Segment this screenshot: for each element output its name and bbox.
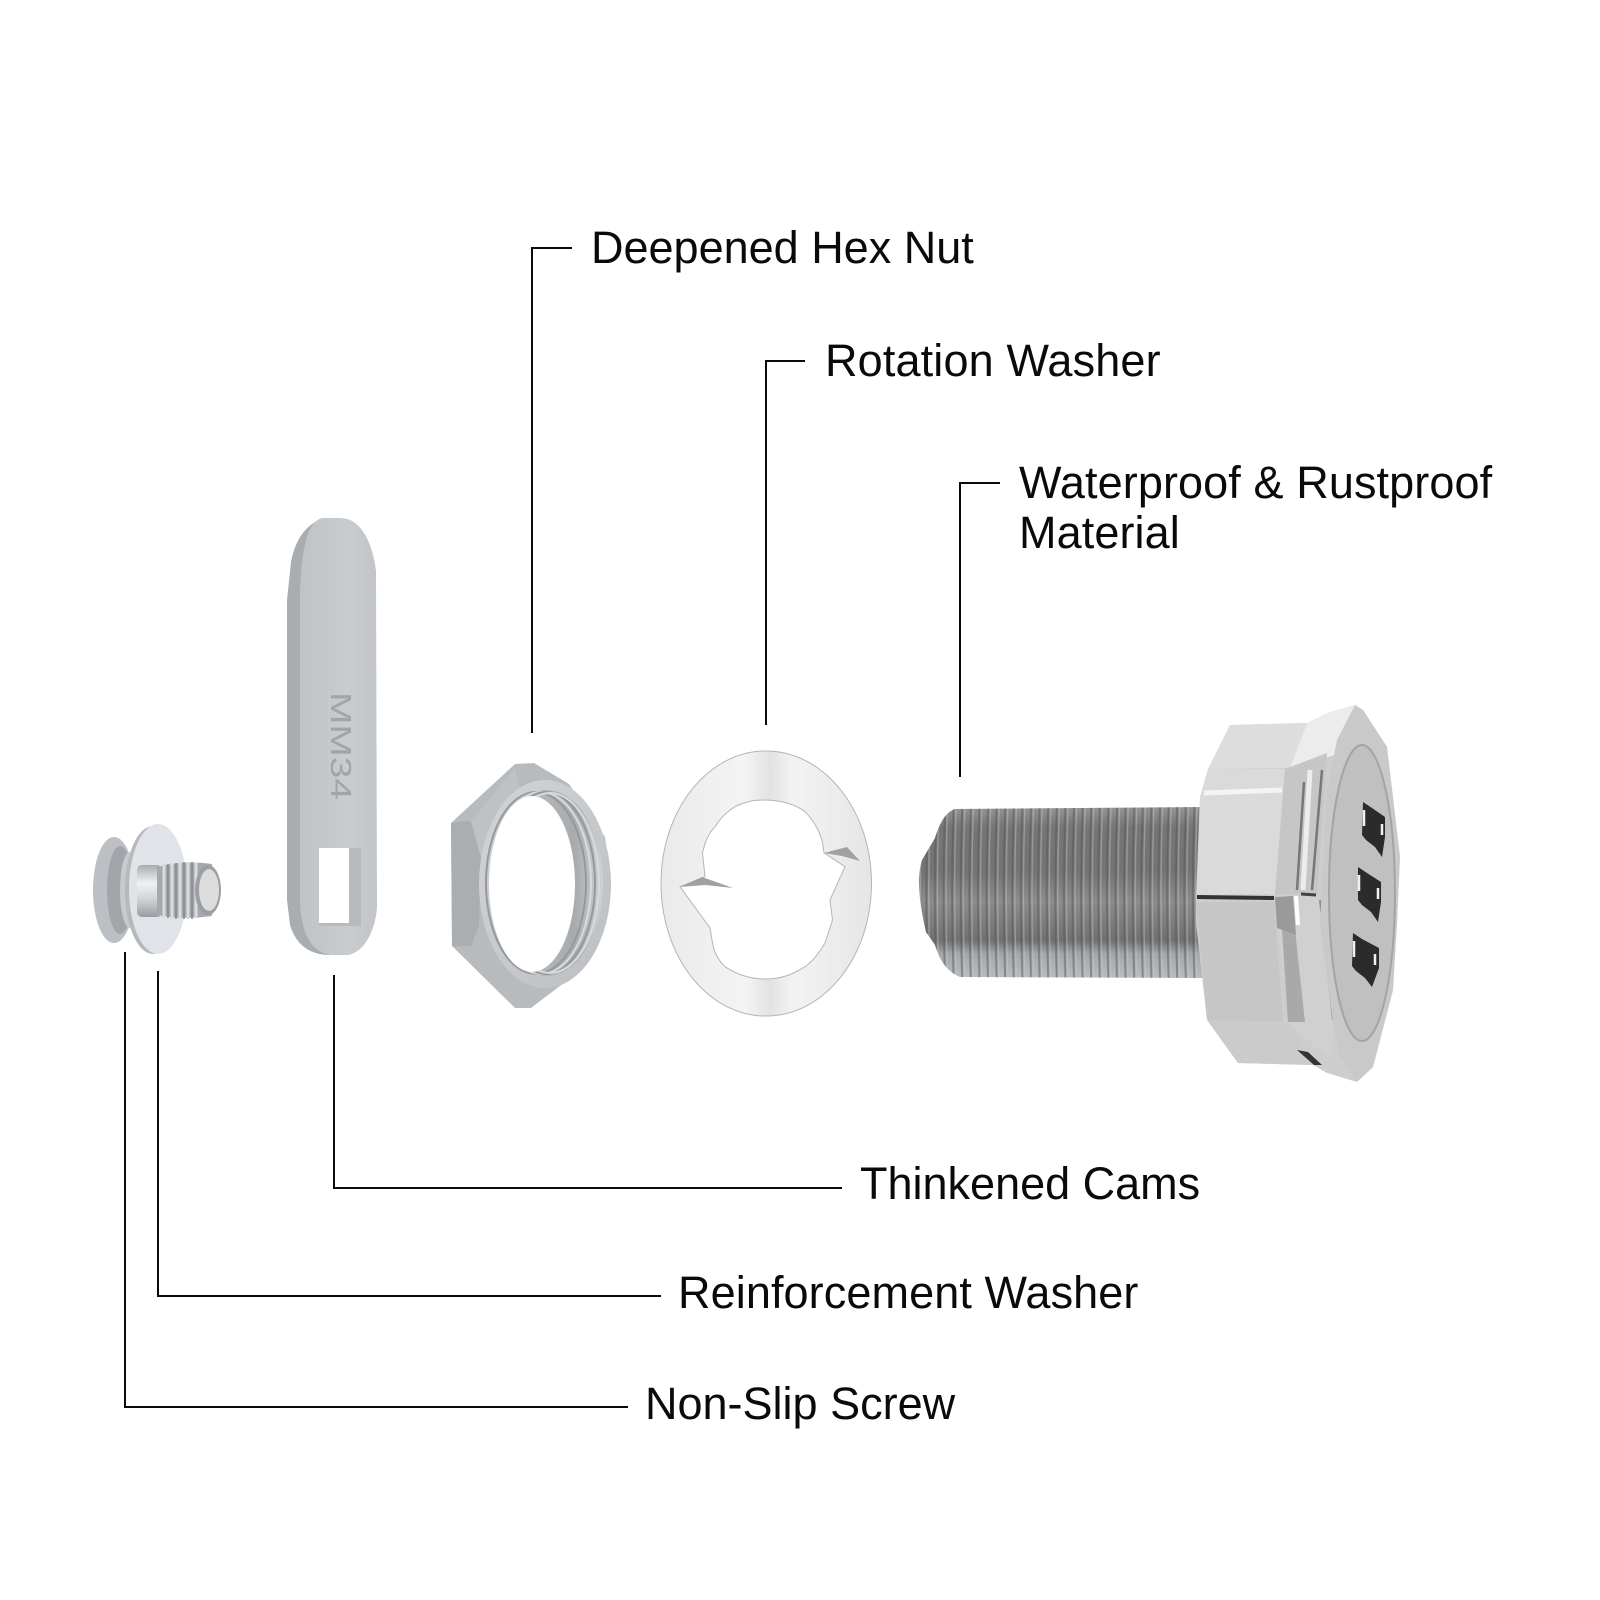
- head chrome bevel: [1275, 753, 1327, 894]
- nut left flat: [451, 821, 481, 946]
- nut ring face: [479, 780, 611, 988]
- dial wheel 3: [1352, 933, 1379, 987]
- nut hole: [489, 796, 575, 972]
- leader: Non-Slip Screw: [125, 952, 628, 1407]
- nut chamfer highlights: [471, 768, 520, 858]
- cam side edge: [287, 518, 330, 955]
- washer tab right: [824, 847, 860, 861]
- cam hole inner wall: [319, 848, 361, 926]
- part: non-slip screw with reinforcement washer: [93, 824, 221, 954]
- leader: Rotation Washer: [766, 361, 805, 725]
- head silhouette: [1196, 705, 1400, 1082]
- screw head: [93, 837, 135, 943]
- head lower front facet: [1196, 902, 1283, 1022]
- part: rotation washer: [661, 751, 872, 1016]
- screw thread: [157, 863, 212, 918]
- part: lock cylinder and head: [919, 705, 1400, 1082]
- dial wheel 2: [1358, 867, 1381, 922]
- leader: Reinforcement Washer: [158, 971, 661, 1296]
- dial wheel 1: [1362, 802, 1385, 857]
- lock head: [1196, 705, 1400, 1082]
- part: deepened hex nut: [451, 763, 611, 1008]
- label: Deepened Hex Nut: Deepened Hex Nut: [591, 222, 974, 273]
- head bottom facet: [1207, 1020, 1313, 1065]
- leader: Waterproof and Rustproof Material: [960, 483, 1000, 777]
- cam square hole: [319, 848, 361, 926]
- label: Waterproof and Rustproof Material: Material: [1019, 507, 1180, 558]
- front plate: [1320, 705, 1400, 1082]
- nut body: [451, 763, 610, 1008]
- label: Thinkened Cams: Thinkened Cams: [860, 1158, 1200, 1209]
- label: Reinforcement Washer: Reinforcement Washer: [678, 1267, 1139, 1318]
- label: Non-Slip Screw: Non-Slip Screw: [645, 1378, 956, 1429]
- part: thickened cam: [287, 518, 377, 955]
- label: Waterproof and Rustproof Material: Waterproof & Rustproof: [1019, 457, 1492, 508]
- head upper bright facet: [1290, 705, 1355, 768]
- washer ring with irregular hole: [661, 751, 872, 1016]
- cam face: [300, 518, 377, 955]
- screw tip: [195, 865, 221, 915]
- threaded cylinder: [919, 807, 1205, 978]
- washer tab left: [680, 877, 733, 888]
- reinforcement washer: [125, 826, 181, 954]
- head top facet: [1208, 723, 1307, 769]
- leader lines: [125, 248, 1000, 1407]
- label: Rotation Washer: Rotation Washer: [825, 335, 1161, 386]
- slot: [1297, 1050, 1322, 1065]
- leader: Deepened Hex Nut: [532, 248, 572, 733]
- cam engraving: MM34: [324, 692, 356, 800]
- head upper front facet: [1197, 769, 1285, 895]
- leader: Thinkened Cams: [334, 975, 842, 1188]
- dial recess: [1329, 745, 1395, 1041]
- head dark seam: [1197, 897, 1274, 898]
- screw shaft: [137, 865, 162, 917]
- nut inner thread: [489, 790, 603, 976]
- spring washer: [120, 852, 140, 928]
